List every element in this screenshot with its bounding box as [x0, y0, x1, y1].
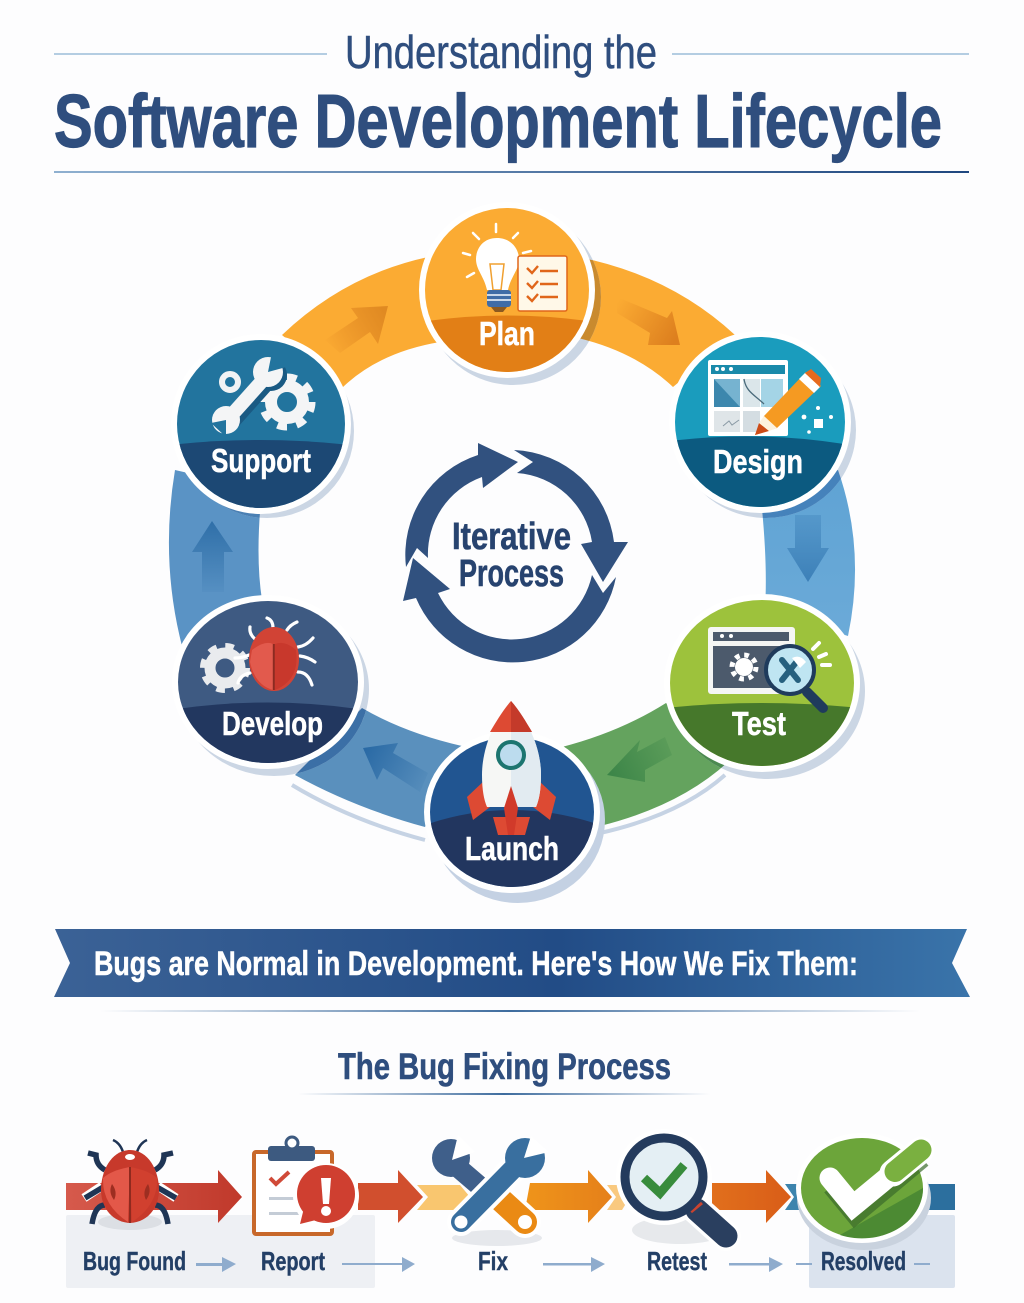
label: Resolved: Resolved — [821, 1246, 906, 1276]
chevron: teal — [785, 1184, 802, 1210]
icon: ring — [222, 374, 238, 390]
stage: Develop — [170, 595, 369, 776]
icon: rocket — [467, 701, 556, 835]
label: Bug Found: Bug Found — [83, 1246, 186, 1276]
icon: crossed wrenches — [432, 1135, 549, 1246]
cycle arrow 3 — [403, 558, 616, 662]
icon: bug — [235, 618, 315, 691]
arc arrow: Develop to Support — [169, 470, 262, 646]
cycle arrow 2 — [514, 450, 628, 582]
label: Fix: Fix — [478, 1246, 508, 1276]
center: iterative process cycle — [403, 443, 628, 662]
connector dashes — [796, 1263, 930, 1265]
flow arrow: retest to resolved — [712, 1170, 791, 1223]
stage: Support — [170, 334, 354, 518]
stage: Design — [669, 331, 856, 518]
icon: sparkles — [802, 406, 833, 434]
connector arrow — [543, 1257, 605, 1272]
label: Iterative Process: Iterative — [452, 516, 571, 558]
arc arrow: Plan to Design — [578, 257, 735, 387]
flow arrow: bug to report — [66, 1170, 242, 1223]
background panel: first steps — [66, 1215, 375, 1288]
connector arrow — [196, 1257, 236, 1272]
chevron: yellow — [417, 1185, 470, 1210]
end bar: teal — [925, 1184, 955, 1210]
label: Launch: Launch — [465, 830, 559, 867]
title block — [54, 26, 969, 173]
label: Report: Report — [261, 1246, 325, 1276]
arc arrow: Design to Test — [760, 470, 855, 636]
lifecycle diagram — [169, 202, 865, 903]
flow arrow: fix to retest — [525, 1170, 612, 1223]
title line: Understanding the: Understanding the — [345, 26, 657, 78]
connector arrow — [342, 1257, 415, 1272]
label: Develop: Develop — [222, 705, 323, 742]
icon: retest magnifier — [616, 1129, 728, 1244]
icon: design window — [708, 360, 788, 436]
icon: magnifier — [766, 643, 830, 708]
arc arrow: Test to Launch — [562, 703, 728, 833]
label: Design: Design — [713, 443, 803, 480]
icon: checklist — [518, 256, 567, 311]
chevron: light orange — [607, 1185, 630, 1210]
label: Plan: Plan — [479, 315, 535, 352]
label: Iterative Process: Process — [459, 553, 564, 595]
arc arrow: Launch to Develop — [292, 708, 462, 840]
stage: Test — [664, 594, 865, 779]
ribbon banner — [54, 929, 970, 997]
icon: resolved check — [796, 1133, 931, 1250]
arc arrow: Support to Plan — [282, 257, 440, 387]
icon: wrench — [211, 352, 290, 437]
stage: Plan — [419, 202, 601, 385]
connector arrow — [729, 1257, 783, 1272]
background panel: resolved — [809, 1215, 955, 1288]
icon: light bulb — [463, 224, 531, 312]
icon: report clipboard — [254, 1137, 359, 1234]
icon: gear — [203, 646, 247, 690]
icon: gear — [262, 377, 312, 427]
flow arrow: report to fix — [358, 1170, 423, 1223]
icon: browser window with gear — [708, 627, 795, 694]
cycle arrow 1 — [405, 443, 518, 567]
label: Support: Support — [211, 442, 311, 479]
label: Retest: Retest — [647, 1246, 707, 1276]
label: Iterative Process — [452, 516, 571, 595]
icon: pencil — [755, 369, 821, 435]
bug fixing process flow — [66, 1129, 955, 1288]
stage: Launch — [424, 701, 605, 903]
section heading: The Bug Fixing Process — [338, 1046, 671, 1087]
label: Test: Test — [732, 705, 786, 742]
icon: red bug — [84, 1140, 176, 1230]
